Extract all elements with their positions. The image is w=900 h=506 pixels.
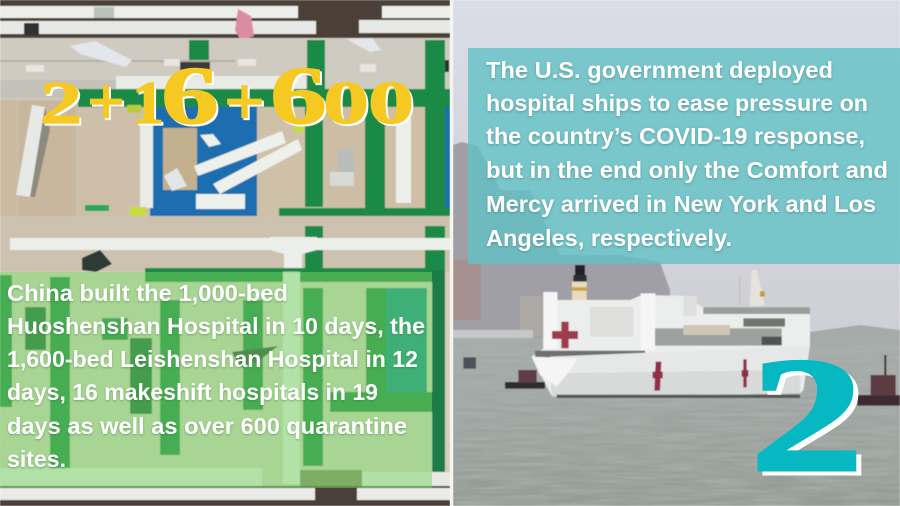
heading: 2+16+600: 6 (163, 51, 221, 143)
text: China hospitals description: sites. (7, 446, 66, 472)
heading: 2+16+600: 0 (370, 72, 416, 138)
panel: US hospital ship photo (453, 0, 900, 506)
text: US hospital ships description: Mercy arrived in New York and Los (486, 191, 876, 217)
text: China hospitals description: China built the 1,000-bed (7, 280, 288, 306)
heading: big number 2: 2 (750, 325, 864, 506)
heading: big number 2 (750, 325, 869, 506)
text: US hospital ships description: Angeles, respectively. (486, 225, 732, 251)
text: China hospitals description: days as well as over 600 quarantine (7, 413, 407, 439)
heading: 2+16+600: + (87, 63, 125, 139)
illustration: hospital ship Comfort (463, 265, 900, 406)
heading: big number 2: 2 (755, 329, 869, 506)
panel: teal text overlay (468, 48, 900, 264)
text: China hospitals description (7, 280, 425, 472)
divider: white gap between photos (450, 0, 453, 506)
heading: 2+16+600: 6 (272, 51, 329, 143)
heading: 2+16+600: 1 (134, 72, 166, 138)
text: US hospital ships description: but in the end only the Comfort and (486, 157, 888, 183)
heading: 2+16+600: 2 (42, 72, 84, 138)
heading: 2+16+600: 6 (270, 49, 327, 141)
heading: 2+16+600: + (89, 65, 127, 141)
heading: 2+16+600: 0 (368, 70, 414, 136)
text: US hospital ships description: hospital ships to ease pressure on (486, 90, 868, 116)
heading: 2+16+600: 0 (323, 70, 369, 136)
heading: 2+16+600: 0 (325, 72, 371, 138)
text: US hospital ships description: The U.S. government deployed (486, 57, 833, 83)
heading: 2+16+600: 2 (40, 70, 82, 136)
panel: China aerial construction photo (0, 0, 450, 506)
text: China hospitals description: 1,600-bed Leishenshan Hospital in 12 (7, 346, 418, 372)
heading: 2+16+600: 6 (161, 49, 219, 141)
heading: 2+16+600: + (224, 63, 265, 139)
text: US hospital ships description (486, 57, 888, 251)
panel: green text overlay (0, 272, 432, 488)
heading: 2+16+600 (40, 49, 416, 143)
text: US hospital ships description: the country’s COVID-19 response, (486, 123, 865, 149)
heading: 2+16+600: + (226, 65, 267, 141)
text: China hospitals description: days, 16 makeshift hospitals in 19 (7, 379, 378, 405)
text: China hospitals description: Huoshenshan Hospital in 10 days, the (7, 313, 425, 339)
heading: 2+16+600: 1 (132, 70, 164, 136)
